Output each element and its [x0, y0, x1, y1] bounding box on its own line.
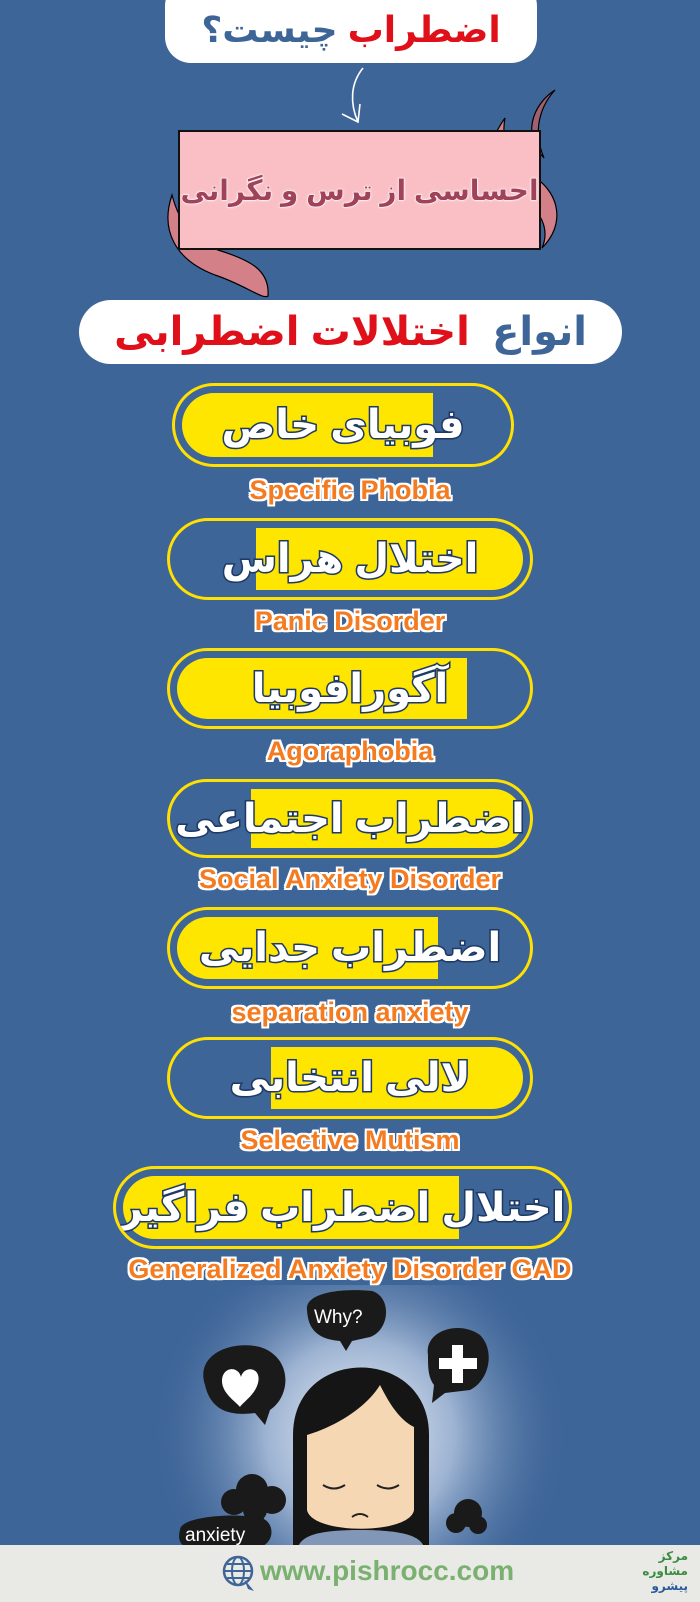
label 1: Specific Phobia [249, 475, 451, 505]
pill 6: لالی انتخابی [230, 1056, 470, 1100]
logo: مشاوره [642, 1564, 688, 1578]
pill 2 [167, 518, 533, 600]
pill 3: آگورافوبیا [252, 666, 448, 710]
footer [0, 1545, 700, 1602]
title box [165, 0, 537, 63]
bubble why: Why? [314, 1307, 363, 1328]
label 2: Panic Disorder [255, 606, 445, 636]
title box: چیست؟ [201, 9, 338, 50]
clouds [221, 1474, 286, 1522]
pink definition box: احساسی از ترس و نگرانی [180, 174, 539, 206]
pill 3 [167, 648, 533, 729]
label 3: Agoraphobia [267, 736, 433, 766]
illustration: anxious girl [179, 1285, 536, 1545]
bubble plus [428, 1328, 489, 1403]
subtitle box [79, 300, 622, 364]
pink definition box [178, 130, 541, 250]
logo: مرکز [659, 1549, 688, 1563]
label 6: Selective Mutism [240, 1125, 460, 1155]
label 7: Generalized Anxiety Disorder GAD [128, 1254, 572, 1284]
pill 5: اضطراب جدایی [199, 926, 501, 970]
face [307, 1385, 414, 1529]
hair [293, 1368, 429, 1545]
pill 4: اضطراب اجتماعی [175, 796, 525, 840]
title box: اضطراب [348, 9, 501, 50]
pill 4 [167, 779, 533, 858]
bubble heart [203, 1345, 285, 1425]
website url: www.pishrocc.com [260, 1555, 514, 1586]
pill 2: اختلال هراس [222, 537, 478, 581]
pill 1: فوبیای خاص [221, 403, 465, 447]
logo [642, 1549, 688, 1593]
pill 7 [113, 1166, 572, 1249]
pill 7: اختلال اضطراب فراگیر [120, 1186, 565, 1230]
subtitle box: انواع [492, 310, 587, 354]
pill 6 [167, 1037, 533, 1119]
label 4: Social Anxiety Disorder [199, 864, 501, 894]
ribbon decorations [167, 90, 558, 298]
arrow [342, 68, 364, 124]
icon: globe [222, 1556, 254, 1591]
logo: پیشرو [651, 1579, 688, 1593]
pill 1 [172, 383, 514, 467]
bubble why [307, 1290, 386, 1351]
pill 5 [167, 907, 533, 989]
anxiety bubble [179, 1507, 271, 1547]
subtitle box: اختلالات اضطرابی [114, 310, 470, 354]
label 5: separation anxiety [231, 997, 469, 1027]
shirt [298, 1530, 424, 1547]
